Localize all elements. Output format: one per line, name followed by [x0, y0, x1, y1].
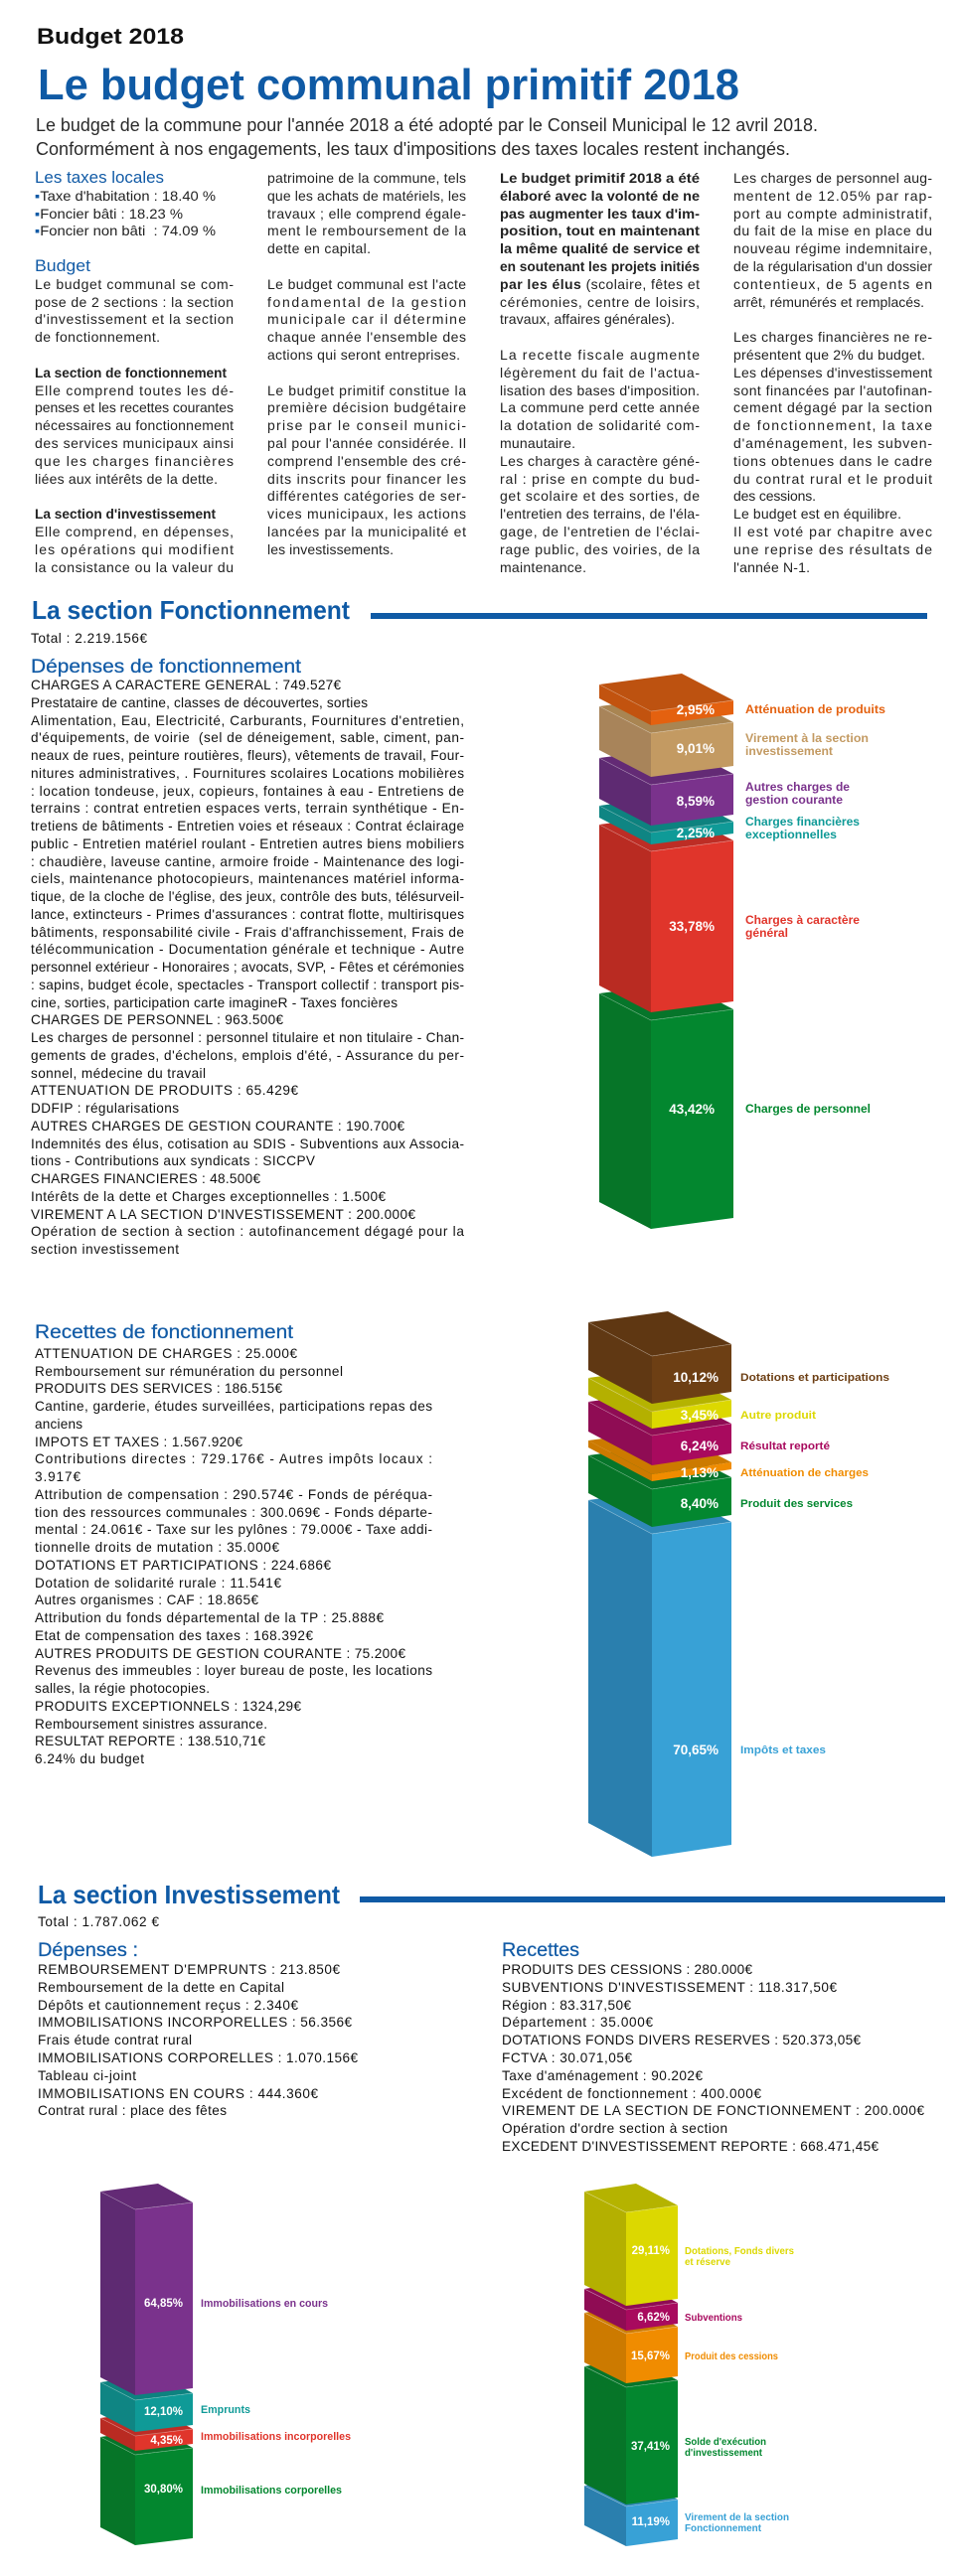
text column 3: élaboré avec la volonté de ne — [500, 188, 700, 204]
text column 2: dits inscrits pour financer les — [267, 471, 466, 487]
text column 2: comprend l'ensemble des cré- — [267, 453, 466, 469]
text block: Recettes de fonctionnement: Cantine, garderie, études surveillées, participations repas des — [35, 1399, 432, 1414]
segment: solde d'exécution d'investissement: d'investissement — [685, 2448, 763, 2459]
text column 3: cérémonies, centre de loisirs, — [500, 294, 700, 310]
text block: Dépenses de fonctionnement: terrains : contrat entretien espaces verts, terrain synthétique - En- — [31, 801, 464, 816]
text block: Recettes de fonctionnement: tion des ressources communales : 300.069€ - Fonds départe- — [35, 1505, 432, 1520]
text block: Recettes de fonctionnement: Remboursement sinistres assurance. — [35, 1717, 267, 1732]
text block: Dépenses de fonctionnement: sonnel, médecine du travail — [31, 1066, 206, 1081]
text column 4: Les dépenses d'investissement — [733, 365, 932, 380]
text column 1: pose de 2 sections : la section — [35, 294, 234, 310]
section heading: La section Fonctionnement — [32, 595, 927, 625]
segment: autres charges de gestion courante — [599, 747, 850, 826]
segment: subventions: Subventions — [685, 2313, 742, 2324]
text block: Dépenses de fonctionnement: Prestataire de cantine, classes de découvertes, sorties — [31, 695, 368, 710]
text column 3: ral : prise en compte du bud- — [500, 471, 700, 487]
text column 3: la dotation de solidarité com- — [500, 417, 700, 433]
text block: dépenses d'investissement: Tableau ci-joint — [38, 2068, 136, 2083]
text column 2: Le budget communal est l'acte — [267, 276, 466, 292]
text block: Recettes de fonctionnement: anciens — [35, 1417, 82, 1432]
total investissement: Total : 1.787.062 € — [38, 1914, 159, 1929]
segment: virement de la section fonctionnement — [584, 2478, 789, 2546]
intro text — [36, 115, 818, 159]
text column 2: que les achats de matériels, les — [267, 188, 466, 204]
text block: Recettes de fonctionnement: Revenus des immeubles : loyer bureau de poste, les locations — [35, 1663, 432, 1678]
segment: virement de la section fonctionnement: Virement de la section — [685, 2512, 789, 2523]
text block: recettes d'investissement: Opération d'ordre section à section — [502, 2121, 727, 2136]
text block: Recettes de fonctionnement: Attribution du fonds départemental de la TP : 25.888€ — [35, 1610, 384, 1625]
text block: Dépenses de fonctionnement: section investissement — [31, 1242, 179, 1257]
segment: résultat reporté: Résultat reporté — [740, 1440, 830, 1452]
text block: recettes d'investissement: DOTATIONS FONDS DIVERS RESERVES : 520.373,05€ — [502, 2033, 861, 2047]
segment: virement de la section fonctionnement: 11,19% — [632, 2516, 670, 2528]
kicker: Budget 2018: Budget 2018 — [37, 24, 184, 49]
segment: dotations et participations — [588, 1311, 889, 1404]
text block: Recettes de fonctionnement: AUTRES PRODUITS DE GESTION COURANTE : 75.200€ — [35, 1646, 405, 1661]
text column 1: ▪Foncier non bâti : 74.09 % — [35, 223, 216, 238]
text column 1: les opérations qui modifient — [35, 541, 234, 557]
text block: Recettes de fonctionnement: Autres organismes : CAF : 18.865€ — [35, 1592, 258, 1607]
text column 4 — [733, 170, 932, 575]
text column 1: liées aux intérêts de la dette. — [35, 471, 218, 487]
segment: immobilisations incorporelles — [100, 2410, 351, 2451]
text block: Dépenses de fonctionnement: ciels, maintenance photocopieurs, maintenances matériel informa- — [31, 871, 464, 886]
segment: impôts et taxes: Impôts et taxes — [740, 1744, 826, 1756]
text block: Dépenses de fonctionnement: tique, de la cloche de l'église, des jeux, contrôle des buts, télésurveil- — [31, 889, 464, 904]
text column 2: lancées par la municipalité et — [267, 524, 466, 539]
text block: Recettes de fonctionnement — [35, 1322, 432, 1766]
text block: dépenses d'investissement: Dépenses : — [38, 1940, 138, 1961]
text column 3: Le budget primitif 2018 a été — [500, 170, 700, 186]
text column 2: chaque année l'ensemble des — [267, 329, 466, 345]
segment: charges de personnel: Charges de personnel — [745, 1102, 871, 1116]
text column 1: Elle comprend toutes les dé- — [35, 382, 234, 398]
text block: Recettes de fonctionnement: RESULTAT REPORTE : 138.510,71€ — [35, 1734, 265, 1748]
text block: Dépenses de fonctionnement: Dépenses de fonctionnement — [31, 657, 302, 678]
segment: atténuation de produits: 2,95% — [677, 702, 715, 717]
segment: atténuation de charges: 1,13% — [681, 1465, 719, 1480]
intro text: Conformément à nos engagements, les taux d'impositions des taxes locales restent inchangés. — [36, 139, 790, 159]
text block: Dépenses de fonctionnement: nitures administratives, . Fournitures scolaires Locations mobilières — [31, 766, 464, 781]
text column 3: maintenance. — [500, 559, 586, 575]
text column 2: actions qui seront entreprises. — [267, 347, 460, 363]
segment: atténuation de charges — [588, 1430, 869, 1481]
segment: impôts et taxes: 70,65% — [673, 1743, 719, 1757]
text block: Dépenses de fonctionnement: Les charges de personnel : personnel titulaire et non titulaire - Chan- — [31, 1030, 464, 1045]
text block: Dépenses de fonctionnement: lance, extincteurs - Primes d'assurances : contrat flotte, multirisques — [31, 907, 464, 922]
segment: charges financières exceptionnelles: 2,25% — [677, 826, 715, 840]
text block: recettes d'investissement: Recettes — [502, 1940, 579, 1961]
text column 3: gage, de l'entretien de l'éclai- — [500, 524, 700, 539]
text column 4: du fait de la mise en place du — [733, 223, 932, 238]
text column 4: d'aménagement, les subven- — [733, 435, 932, 451]
text block: Dépenses de fonctionnement: Indemnités des élus, cotisation au SDIS - Subventions aux Associa- — [31, 1136, 464, 1151]
text block: dépenses d'investissement: IMMOBILISATIONS CORPORELLES : 1.070.156€ — [38, 2050, 358, 2065]
text column 3: en soutenant les projets initiés — [500, 258, 700, 274]
text block: dépenses d'investissement: Dépôts et cautionnement reçus : 2.340€ — [38, 1998, 298, 2013]
text column 2: pal pour l'année considérée. Il — [267, 435, 466, 451]
text column 3 — [500, 170, 700, 575]
text column 1: que les charges financières — [35, 453, 234, 469]
segment: immobilisations incorporelles: Immobilisations incorporelles — [201, 2431, 351, 2443]
text block: Dépenses de fonctionnement: DDFIP : régularisations — [31, 1101, 179, 1116]
text block: Dépenses de fonctionnement: personnel extérieur - Honoraires ; avocats, SVP, - Fêtes et cérémonies — [31, 960, 464, 975]
segment: charges à caractère général — [599, 814, 860, 1012]
text column 3: lisation des bases d'imposition. — [500, 382, 700, 398]
text column 2: différentes catégories de ser- — [267, 488, 466, 504]
text column 3: l'entretien des terrains, de l'éla- — [500, 506, 700, 522]
text column 4: Les charges financières ne re- — [733, 329, 932, 345]
text column 3: La recette fiscale augmente — [500, 347, 700, 363]
segment: virement à la section investissement: 9,01% — [677, 741, 715, 756]
text block: Dépenses de fonctionnement: : location tondeuse, jeux, copieurs, fontaines à eau - Entretiens de — [31, 784, 464, 799]
text block: Recettes de fonctionnement: 6.24% du budget — [35, 1751, 144, 1766]
segment: solde d'exécution d'investissement: 37,41% — [631, 2441, 670, 2453]
stacked chart: dépenses de fonctionnement — [599, 674, 885, 1229]
text column 3: par les élus (scolaire, fêtes et — [500, 276, 700, 292]
text block: dépenses d'investissement: Remboursement de la dette en Capital — [38, 1980, 284, 1995]
segment: virement à la section investissement — [599, 695, 869, 777]
segment: immobilisations corporelles: Immobilisations corporelles — [201, 2485, 342, 2497]
text block: Recettes de fonctionnement: DOTATIONS ET PARTICIPATIONS : 224.686€ — [35, 1558, 331, 1573]
text column 3: la même qualité de service et — [500, 240, 700, 256]
segment: produit des cessions — [584, 2305, 778, 2383]
text block: Recettes de fonctionnement: Remboursement sur rémunération du personnel — [35, 1364, 343, 1379]
text block: dépenses d'investissement: IMMOBILISATIONS INCORPORELLES : 56.356€ — [38, 2015, 352, 2030]
text block: recettes d'investissement: EXCEDENT D'INVESTISSEMENT REPORTE : 668.471,45€ — [502, 2139, 879, 2154]
text block: Recettes de fonctionnement: ATTENUATION DE CHARGES : 25.000€ — [35, 1346, 297, 1361]
text column 1: La section d'investissement — [35, 506, 216, 522]
segment: atténuation de charges: Atténuation de charges — [740, 1467, 869, 1479]
segment: charges à caractère général: 33,78% — [669, 919, 715, 934]
text block: Dépenses de fonctionnement: : sapins, budget école, spectacles - Transport collectif : transport pis- — [31, 978, 464, 992]
text block: Dépenses de fonctionnement: CHARGES DE PERSONNEL : 963.500€ — [31, 1012, 283, 1027]
text column 1: Le budget communal se com- — [35, 276, 234, 292]
text block: dépenses d'investissement: IMMOBILISATIONS EN COURS : 444.360€ — [38, 2086, 318, 2101]
intro text: Le budget de la commune pour l'année 2018 a été adopté par le Conseil Municipal le 12 avril 2018. — [36, 115, 818, 135]
segment: autre produit — [588, 1367, 816, 1429]
text block: Dépenses de fonctionnement: ATTENUATION DE PRODUITS : 65.429€ — [31, 1083, 298, 1098]
segment: autres charges de gestion courante: Autres charges de — [745, 780, 850, 794]
segment: emprunts — [100, 2374, 250, 2432]
text block: recettes d'investissement: Région : 83.317,50€ — [502, 1998, 631, 2013]
text block: Dépenses de fonctionnement: CHARGES FINANCIERES : 48.500€ — [31, 1171, 260, 1186]
segment: charges à caractère général: général — [745, 926, 788, 940]
text column 4: Il est voté par chapitre avec — [733, 524, 932, 539]
text column 2: les investissements. — [267, 541, 394, 557]
segment: immobilisations en cours: 64,85% — [144, 2298, 183, 2310]
text block: Dépenses de fonctionnement: : chaudière, laveuse cantine, armoire froide - Maintenance des logi- — [31, 854, 464, 869]
text column 1: Budget — [35, 256, 90, 275]
segment: subventions: 6,62% — [637, 2312, 670, 2324]
segment: produit des cessions: 15,67% — [631, 2350, 670, 2362]
segment: immobilisations incorporelles: 4,35% — [150, 2435, 183, 2447]
text block: recettes d'investissement: PRODUITS DES CESSIONS : 280.000€ — [502, 1962, 752, 1977]
segment: immobilisations corporelles — [100, 2429, 342, 2545]
segment: autres charges de gestion courante: gestion courante — [745, 793, 843, 807]
text block: Dépenses de fonctionnement — [31, 657, 464, 1257]
segment: dotations, fonds divers et réserve: Dotations, Fonds divers — [685, 2246, 794, 2257]
segment: produit des cessions: Produit des cessions — [685, 2351, 778, 2362]
text block: recettes d'investissement: Excédent de fonctionnement : 400.000€ — [502, 2086, 761, 2101]
segment: produit des services — [588, 1444, 853, 1527]
text block: Recettes de fonctionnement: 3.917€ — [35, 1469, 80, 1484]
segment: produit des services: Produit des services — [740, 1498, 853, 1510]
segment: autres charges de gestion courante: 8,59% — [677, 794, 715, 809]
text column 4: Le budget est en équilibre. — [733, 506, 901, 522]
text column 3: La commune perd cette année — [500, 399, 700, 415]
text block: Dépenses de fonctionnement: télécommunication - Documentation générale et technique - Autre — [31, 942, 464, 957]
text block: recettes d'investissement — [502, 1940, 924, 2154]
text column 3: pas augmenter les taux d'im- — [500, 206, 700, 222]
text block: Recettes de fonctionnement: mental : 24.061€ - Taxe sur les pylônes : 79.000€ - Taxe addi- — [35, 1522, 432, 1537]
text block: Dépenses de fonctionnement: gements de grades, d'échelons, emplois d'été, - Assurance du per- — [31, 1048, 464, 1063]
text column 4: contentieux, de 5 agents en — [733, 276, 932, 292]
text column 2: vices municipaux, les actions — [267, 506, 466, 522]
text column 1: Les taxes locales — [35, 168, 164, 187]
text column 1: nécessaires au fonctionnement — [35, 417, 234, 433]
text column 2: première décision budgétaire — [267, 399, 466, 415]
text block: Recettes de fonctionnement: PRODUITS EXCEPTIONNELS : 1324,29€ — [35, 1699, 301, 1714]
segment: virement de la section fonctionnement: Fonctionnement — [685, 2523, 762, 2534]
text block: dépenses d'investissement — [38, 1940, 358, 2118]
text column 4: Les charges de personnel aug- — [733, 170, 932, 186]
text block: Recettes de fonctionnement: Etat de compensation des taxes : 168.392€ — [35, 1628, 313, 1643]
text column 4: nouveau régime indemnitaire, — [733, 240, 932, 256]
section heading: La section Investissement: La section Investissement — [38, 1880, 340, 1909]
segment: autre produit: 3,45% — [681, 1408, 719, 1423]
segment: dotations et participations: Dotations et participations — [740, 1372, 889, 1384]
text block: Dépenses de fonctionnement: tretiens de bâtiments - Entretien voies et réseaux : Contrat éclairage — [31, 819, 464, 833]
text block: Recettes de fonctionnement: tionnelle droits de mutation : 35.000€ — [35, 1540, 279, 1555]
text column 1: ▪Foncier bâti : 18.23 % — [35, 206, 183, 222]
text column 4: du contrat rural et le produit — [733, 471, 932, 487]
text column 3: position, tout en maintenant — [500, 223, 700, 238]
segment: charges financières exceptionnelles — [599, 795, 860, 844]
segment: dotations et participations: 10,12% — [673, 1370, 719, 1385]
stacked chart: dépenses d'investissement — [100, 2184, 351, 2545]
text column 1 — [35, 168, 234, 575]
text column 2: Le budget primitif constitue la — [267, 382, 466, 398]
segment: charges financières exceptionnelles: Charges financières — [745, 815, 860, 829]
segment: charges de personnel — [599, 983, 871, 1229]
text block: Recettes de fonctionnement: Recettes de fonctionnement — [35, 1322, 294, 1343]
text column 1: penses et les recettes courantes — [35, 399, 234, 415]
text block: dépenses d'investissement: Contrat rural : place des fêtes — [38, 2103, 227, 2118]
text column 1: d'investissement et la section — [35, 311, 234, 327]
text column 4: présentent que 2% du budget. — [733, 347, 925, 363]
text column 4: mentent de 12.05% par rap- — [733, 188, 932, 204]
text column 4: cement dégagé par la section — [733, 399, 932, 415]
text column 3: munautaire. — [500, 435, 575, 451]
text block: Dépenses de fonctionnement: Intérêts de la dette et Charges exceptionnelles : 1.500€ — [31, 1189, 386, 1204]
text block: Dépenses de fonctionnement: neaux de rues, peinture routières, fleurs), vêtements de travail, Four- — [31, 748, 464, 763]
text block: recettes d'investissement: SUBVENTIONS D'INVESTISSEMENT : 118.317,50€ — [502, 1980, 837, 1995]
text column 4: tions obtenues dans le cadre — [733, 453, 932, 469]
section heading: La section Investissement — [38, 1880, 945, 1909]
text column 3: rage public, des voiries, de la — [500, 541, 700, 557]
text column 1: ▪Taxe d'habitation : 18.40 % — [35, 188, 216, 204]
segment: solde d'exécution d'investissement — [584, 2358, 766, 2504]
segment: emprunts: 12,10% — [144, 2406, 183, 2418]
title: Le budget communal primitif 2018 — [38, 61, 739, 109]
segment: charges de personnel: 43,42% — [669, 1102, 715, 1117]
text column 1: des services municipaux ainsi — [35, 435, 234, 451]
text block: Dépenses de fonctionnement: Alimentation, Eau, Electricité, Carburants, Fournitures d'entretien, — [31, 713, 464, 728]
text column 4: port au compte administratif, — [733, 206, 932, 222]
segment: autre produit: Autre produit — [740, 1410, 816, 1422]
segment: solde d'exécution d'investissement: Solde d'exécution — [685, 2437, 766, 2448]
text block: Recettes de fonctionnement: IMPOTS ET TAXES : 1.567.920€ — [35, 1435, 242, 1449]
text block: Dépenses de fonctionnement: CHARGES A CARACTERE GENERAL : 749.527€ — [31, 678, 341, 692]
text column 1: la consistance ou la valeur du — [35, 559, 234, 575]
text column 1: Elle comprend, en dépenses, — [35, 524, 234, 539]
text block: Dépenses de fonctionnement: AUTRES CHARGES DE GESTION COURANTE : 190.700€ — [31, 1119, 404, 1134]
section heading: La section Fonctionnement: La section Fonctionnement — [32, 595, 350, 625]
segment: résultat reporté — [588, 1391, 830, 1465]
segment: subventions — [584, 2281, 742, 2331]
text column 4: de fonctionnement, la taxe — [733, 417, 932, 433]
text block: recettes d'investissement: VIREMENT DE LA SECTION DE FONCTIONNEMENT : 200.000€ — [502, 2103, 924, 2118]
text column 2: prise par le conseil munici- — [267, 417, 466, 433]
segment: emprunts: Emprunts — [201, 2404, 250, 2416]
text column 3: travaux, affaires générales). — [500, 311, 675, 327]
stacked chart: recettes de fonctionnement — [588, 1311, 889, 1857]
text column 2: municipale car il détermine — [267, 311, 466, 327]
text block: recettes d'investissement: Département : 35.000€ — [502, 2015, 653, 2030]
segment: virement à la section investissement: investissement — [745, 744, 833, 758]
text block: dépenses d'investissement: Frais étude contrat rural — [38, 2033, 192, 2047]
segment: dotations, fonds divers et réserve: et réserve — [685, 2257, 730, 2268]
text column 4: l'année N-1. — [733, 559, 810, 575]
segment: virement à la section investissement: Virement à la section — [745, 731, 869, 745]
text column 4: de la régularisation d'un dossier — [733, 258, 932, 274]
segment: immobilisations corporelles: 30,80% — [144, 2484, 183, 2496]
text block: Dépenses de fonctionnement: bâtiments, responsabilité civile - Frais d'affranchissement, Frais de — [31, 925, 464, 940]
segment: immobilisations en cours: Immobilisations en cours — [201, 2298, 328, 2310]
text block: Recettes de fonctionnement: Contributions directes : 729.176€ - Autres impôts locaux : — [35, 1451, 432, 1466]
text block: Dépenses de fonctionnement: cine, sorties, participation carte imagineR - Taxes foncières — [31, 995, 398, 1010]
text column 1: de fonctionnement. — [35, 329, 160, 345]
text block: Dépenses de fonctionnement: public - Entretien matériel roulant - Entretien autres biens mobiliers — [31, 836, 464, 851]
segment: dotations, fonds divers et réserve — [584, 2184, 794, 2306]
segment: impôts et taxes — [588, 1489, 826, 1857]
text column 2: ment le remboursement de la — [267, 223, 466, 238]
text column 2: patrimoine de la commune, tels — [267, 170, 466, 186]
segment: charges à caractère général: Charges à caractère — [745, 913, 860, 927]
text block: Dépenses de fonctionnement: tions - Contributions aux syndicats : SICCPV — [31, 1153, 315, 1168]
text block: Recettes de fonctionnement: Attribution de compensation : 290.574€ - Fonds de péréqua- — [35, 1487, 432, 1502]
text column 2: dette en capital. — [267, 240, 371, 256]
text block: Recettes de fonctionnement: Dotation de solidarité rurale : 11.541€ — [35, 1576, 281, 1591]
segment: atténuation de produits: Atténuation de produits — [745, 702, 885, 716]
segment: immobilisations en cours — [100, 2184, 328, 2395]
text column 3: légèrement du fait de l'actua- — [500, 365, 700, 380]
text column 1: La section de fonctionnement — [35, 365, 227, 380]
text column 4: sont financées par l'autofinan- — [733, 382, 932, 398]
segment: atténuation de produits — [599, 674, 885, 725]
text block: dépenses d'investissement: REMBOURSEMENT D'EMPRUNTS : 213.850€ — [38, 1962, 340, 1977]
text block: Dépenses de fonctionnement: Opération de section à section : autofinancement dégagé pour la — [31, 1224, 464, 1239]
segment: charges financières exceptionnelles: exceptionnelles — [745, 828, 837, 841]
text column 4: une reprise des résultats de — [733, 541, 932, 557]
text column 4: arrêt, rémunérés et remplacés. — [733, 294, 924, 310]
text column 2: travaux ; elle comprend égale- — [267, 206, 466, 222]
total fonctionnement: Total : 2.219.156€ — [31, 631, 147, 646]
text column 3: get scolaire et des sorties, de — [500, 488, 700, 504]
text column 2: fondamental de la gestion — [267, 294, 466, 310]
text block: Recettes de fonctionnement: PRODUITS DES SERVICES : 186.515€ — [35, 1381, 282, 1396]
segment: résultat reporté: 6,24% — [681, 1439, 719, 1453]
text block: Recettes de fonctionnement: salles, la régie photocopies. — [35, 1681, 210, 1696]
segment: produit des services: 8,40% — [681, 1496, 719, 1511]
text column 4: des cessions. — [733, 488, 816, 504]
text column 3: Les charges à caractère géné- — [500, 453, 700, 469]
text block: recettes d'investissement: Taxe d'aménagement : 90.202€ — [502, 2068, 703, 2083]
text block: Dépenses de fonctionnement: VIREMENT A LA SECTION D'INVESTISSEMENT : 200.000€ — [31, 1207, 415, 1222]
text column 2 — [267, 170, 466, 557]
stacked chart: recettes d'investissement — [584, 2184, 794, 2546]
text block: recettes d'investissement: FCTVA : 30.071,05€ — [502, 2050, 632, 2065]
text block: Dépenses de fonctionnement: d'équipements, de voirie (sel de déneigement, sable, ciment, pan- — [31, 730, 464, 745]
segment: dotations, fonds divers et réserve: 29,11% — [632, 2245, 670, 2257]
